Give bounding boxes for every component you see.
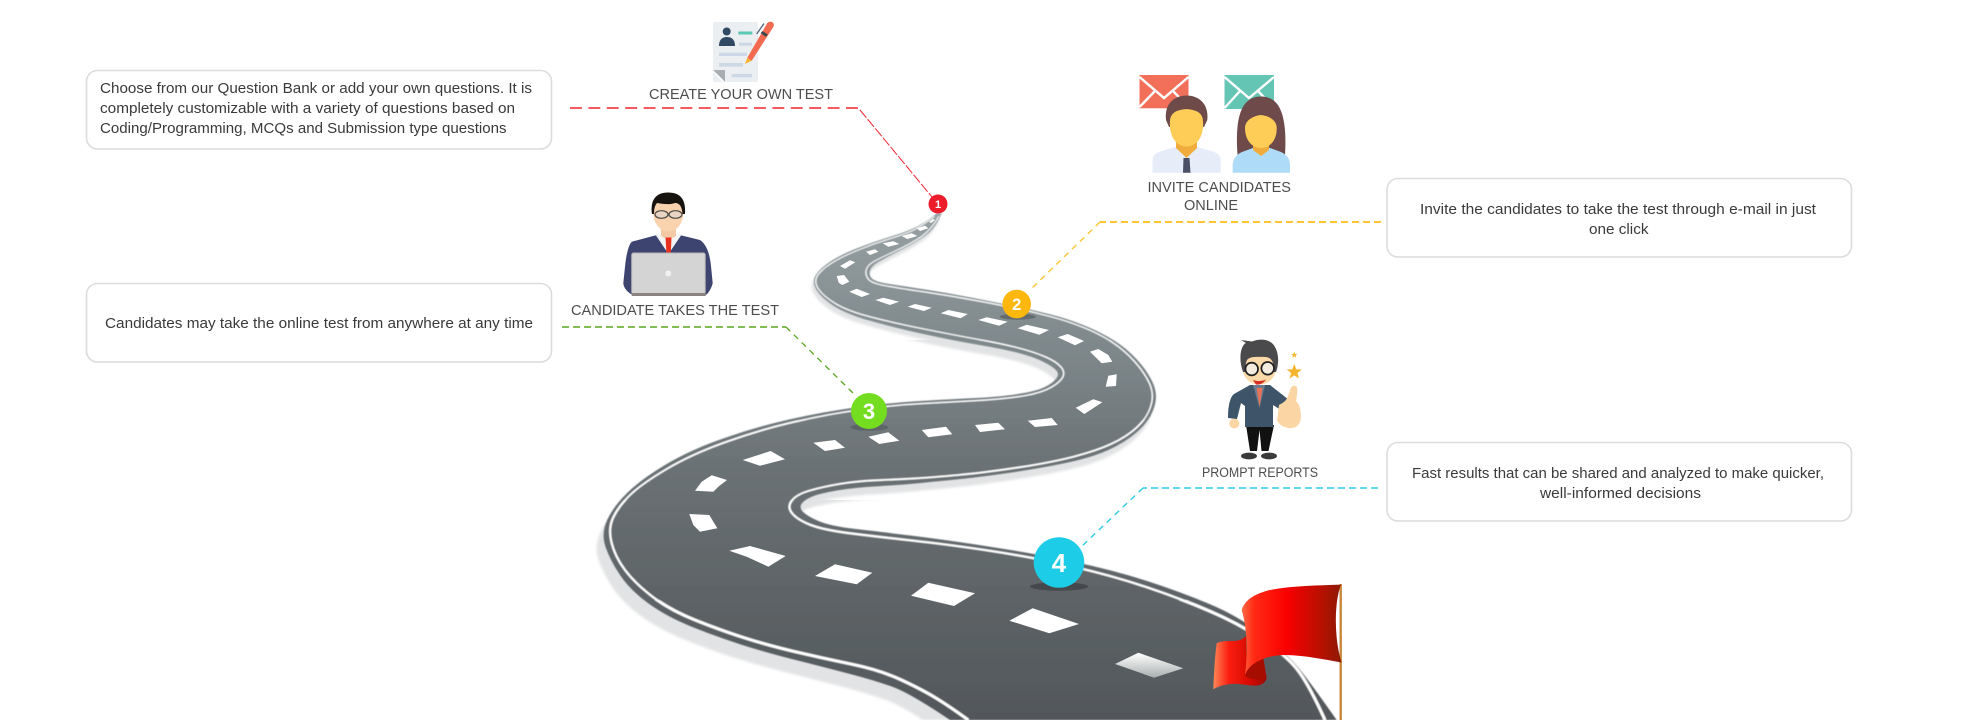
marker 4: 4 bbox=[1052, 548, 1067, 578]
heading: create your own test: CREATE YOUR OWN TEST bbox=[649, 86, 833, 103]
flag main bbox=[1242, 585, 1342, 675]
panel text: question bank bbox=[100, 81, 532, 137]
marker 4 bbox=[1030, 537, 1088, 591]
road centre dashes bbox=[689, 219, 1183, 678]
icon: man and woman with envelopes bbox=[1140, 75, 1290, 173]
panel text: take the test: Candidates may take the online test from anywhere at any time bbox=[105, 316, 533, 332]
heading: prompt reports: PROMPT REPORTS bbox=[1202, 465, 1318, 480]
marker 3 bbox=[850, 393, 888, 431]
icon: red envelope bbox=[1140, 75, 1188, 108]
connector: step 1 red bbox=[570, 108, 932, 197]
heading: invite candidates online: ONLINE bbox=[1184, 197, 1238, 214]
panel text: invite by e-mail bbox=[1420, 202, 1816, 238]
icon: head with glasses bbox=[1240, 340, 1278, 385]
icon: jacket and arms bbox=[1228, 385, 1289, 428]
panel text: invite by e-mail: Invite the candidates to take the test through e-mail in just bbox=[1420, 202, 1816, 218]
heading: invite candidates online: INVITE CANDIDATES bbox=[1148, 179, 1291, 196]
flag pole bbox=[1340, 584, 1342, 720]
icon: teal envelope bbox=[1224, 75, 1274, 109]
icon: legs and shoes bbox=[1241, 425, 1277, 459]
connector: step 3 green bbox=[562, 327, 855, 395]
panel text: fast results: well-informed decisions bbox=[1539, 486, 1701, 502]
marker 3: 3 bbox=[863, 399, 875, 424]
icon: thumbs-up businessman with stars bbox=[1228, 340, 1302, 459]
flag back fold bbox=[1213, 636, 1267, 689]
panel text: question bank: Choose from our Question Bank or add your own questions. It is bbox=[100, 81, 532, 97]
marker 2: 2 bbox=[1012, 296, 1021, 314]
winding road bbox=[597, 213, 1337, 720]
marker 2 bbox=[1000, 290, 1036, 320]
connector: step 2 yellow bbox=[1030, 222, 1381, 290]
road shadow bbox=[596, 220, 1152, 720]
icon: candidate at laptop bbox=[623, 192, 713, 296]
panel: fast results bbox=[1387, 442, 1852, 521]
heading: candidate takes the test: CANDIDATE TAKES THE TEST bbox=[571, 302, 779, 319]
panel text: fast results bbox=[1412, 466, 1824, 502]
marker 1: 1 bbox=[935, 199, 941, 211]
panel text: fast results: Fast results that can be shared and analyzed to make quicker, bbox=[1412, 466, 1824, 482]
icon: thumb and fist bbox=[1277, 386, 1301, 428]
panel: take the test bbox=[86, 284, 552, 362]
icon: gold stars bbox=[1287, 352, 1302, 378]
road surface and edge lines bbox=[604, 213, 1337, 720]
icon: man bbox=[1152, 96, 1221, 173]
heading: invite candidates online bbox=[1148, 179, 1291, 214]
icon: woman bbox=[1233, 96, 1290, 173]
panel: invite by e-mail bbox=[1387, 178, 1852, 257]
panel text: invite by e-mail: one click bbox=[1589, 222, 1649, 238]
panel text: question bank: Coding/Programming, MCQs and Submission type questions bbox=[100, 121, 507, 137]
icon: test document and pen bbox=[713, 22, 774, 82]
marker 1 bbox=[928, 194, 948, 214]
flag fold shadow bbox=[1245, 658, 1267, 679]
flag bbox=[1213, 584, 1342, 720]
connector: step 4 cyan bbox=[1081, 488, 1378, 547]
panel: question bank bbox=[86, 70, 552, 149]
panel text: question bank: completely customizable with a variety of questions based on bbox=[100, 101, 515, 117]
